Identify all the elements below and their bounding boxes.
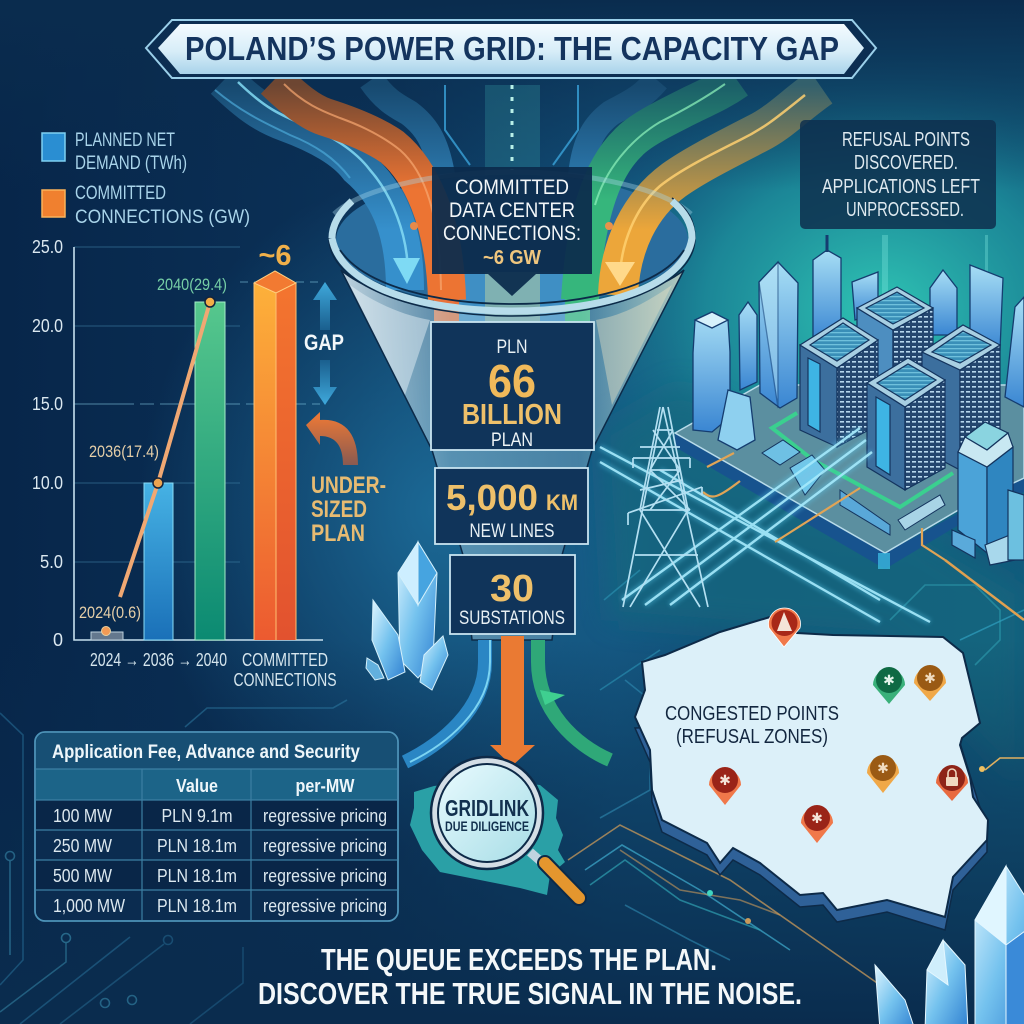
text: refusal points: REFUSAL POINTS — [842, 129, 970, 151]
legend item: committed connections: CONNECTIONS (GW) — [75, 207, 250, 228]
table rows: regressive pricing — [263, 836, 387, 856]
gridlink magnifier: DUE DILIGENCE — [445, 818, 529, 834]
axes — [74, 247, 323, 640]
icon: transmission tower — [623, 407, 708, 607]
gap indicator — [304, 282, 344, 405]
corner tower — [952, 422, 1024, 565]
table header: per-MW — [296, 776, 354, 796]
table rows: PLN 18.1m — [157, 896, 237, 916]
pin: west — [709, 767, 741, 805]
funnel interior — [336, 174, 688, 306]
central column — [434, 85, 590, 324]
table rows: 100 MW — [53, 806, 112, 826]
gridlink magnifier: GRIDLINK — [445, 795, 529, 821]
closing statement: THE QUEUE EXCEEDS THE PLAN. — [321, 942, 717, 977]
table header: Value — [176, 776, 218, 796]
map label — [665, 703, 839, 748]
table rows: 250 MW — [53, 836, 112, 856]
funnel stage: PLN 66 billion: PLAN — [491, 430, 533, 451]
undersized plan label — [311, 472, 386, 547]
y axis labels: 25.0 — [32, 237, 63, 257]
trend line — [102, 297, 215, 636]
grid lines — [74, 247, 322, 562]
pin: east lock — [936, 765, 968, 801]
legend item: committed connections: COMMITTED — [75, 183, 166, 204]
table rows: regressive pricing — [263, 806, 387, 826]
text: refusal points: APPLICATIONS LEFT — [822, 176, 980, 198]
text: refusal points — [800, 120, 996, 229]
bar chart — [32, 237, 336, 690]
funnel stage: PLN 66 billion: 66 — [488, 355, 536, 407]
y axis labels: 5.0 — [40, 552, 63, 572]
arrow: orange output — [490, 636, 535, 766]
orange stream left — [274, 80, 447, 300]
closing statement: DISCOVER THE TRUE SIGNAL IN THE NOISE. — [258, 976, 802, 1011]
pin: north-east amber — [914, 665, 946, 701]
y axis labels: 0 — [53, 630, 63, 650]
arrow: up — [313, 282, 337, 330]
table rows: regressive pricing — [263, 896, 387, 916]
legend item: committed connections — [42, 183, 250, 228]
pin: central amber — [867, 755, 899, 793]
lens — [431, 757, 543, 869]
legend — [42, 130, 250, 228]
data center: back — [857, 287, 933, 410]
table rows: PLN 18.1m — [157, 836, 237, 856]
glowing columns — [882, 235, 988, 295]
blue stream centre left — [371, 80, 442, 175]
table title — [36, 733, 397, 769]
data streams entering funnel — [215, 80, 821, 324]
undersized plan label: PLAN — [311, 520, 365, 547]
callout: committed data center connections: DATA CENTER — [449, 199, 575, 222]
arrow: down — [313, 360, 337, 405]
bar 2024 — [91, 632, 123, 640]
bar 2036 — [144, 483, 173, 640]
data labels: 2040(29.4) — [157, 275, 227, 294]
gridlink magnifier — [410, 757, 579, 898]
bar 2040 — [195, 302, 225, 640]
map land — [635, 617, 988, 917]
table rows: PLN 18.1m — [157, 866, 237, 886]
data center: front — [867, 358, 945, 490]
orange feeder lines — [703, 453, 945, 560]
table: application fee, advance and security — [35, 732, 398, 921]
y axis labels: 15.0 — [32, 394, 63, 414]
funnel stage: 30 substations — [450, 555, 575, 634]
pin: central amber: ✱ — [877, 760, 889, 776]
table rows: PLN 9.1m — [162, 806, 232, 826]
funnel stage: 5,000 km: NEW LINES — [470, 521, 554, 542]
crystals: bottom right — [875, 866, 1024, 1024]
table title: Application Fee, Advance and Security — [52, 742, 360, 763]
pin: north-east green — [873, 667, 905, 704]
undersized plan label: SIZED — [311, 496, 367, 523]
data labels: 2036(17.4) — [89, 442, 159, 461]
output streams — [405, 640, 610, 762]
map extruded edge — [635, 720, 987, 930]
x axis labels: CONNECTIONS — [234, 670, 336, 690]
isometric data center city — [675, 235, 1024, 569]
gold stream — [605, 87, 821, 295]
back towers — [693, 235, 1024, 450]
pin: north refusal point — [768, 608, 800, 647]
title banner — [146, 20, 876, 78]
gap label: GAP — [304, 330, 344, 355]
closing statement — [258, 942, 802, 1011]
table rows: regressive pricing — [263, 866, 387, 886]
data center: right — [922, 325, 1000, 470]
funnel stage: 30 substations: SUBSTATIONS — [459, 608, 565, 629]
funnel stage: 5,000 km — [435, 468, 588, 544]
table header — [36, 769, 397, 800]
glowing transmission lines — [600, 428, 930, 622]
crystals: centre — [366, 542, 448, 690]
undersized plan label: UNDER- — [311, 472, 386, 499]
blue stream centre right — [581, 80, 657, 175]
pin: north-east amber: ✱ — [924, 670, 936, 686]
table rows — [36, 769, 397, 920]
green power routes — [772, 413, 953, 507]
x axis labels: COMMITTED — [242, 650, 328, 670]
funnel — [329, 172, 695, 640]
funnel stage: PLN 66 billion: BILLION — [462, 399, 562, 431]
poland silhouette — [410, 782, 565, 895]
text: refusal points: UNPROCESSED. — [846, 199, 964, 221]
circuit traces — [0, 560, 1024, 1024]
value label ~6: ~6 — [258, 240, 292, 272]
pin: north-east green: ✱ — [883, 672, 895, 688]
map label: CONGESTED POINTS — [665, 703, 839, 725]
pin: south: ✱ — [811, 810, 823, 826]
text: refusal points: DISCOVERED. — [854, 152, 958, 174]
data labels — [79, 275, 227, 622]
map: Poland — [635, 608, 988, 930]
magnifier handle — [530, 852, 579, 898]
small substations — [762, 440, 945, 535]
y axis labels — [32, 237, 63, 650]
platform — [675, 385, 1024, 569]
table rows: 500 MW — [53, 866, 112, 886]
funnel stage: 5,000 km: 5,000 — [446, 477, 538, 518]
callout: committed data center connections: ~6 GW — [483, 247, 541, 269]
pin: west: ✱ — [719, 772, 731, 788]
legend item: planned net demand — [42, 130, 187, 174]
funnel stage: PLN 66 billion — [431, 322, 594, 451]
map label: (REFUSAL ZONES) — [676, 726, 828, 748]
table rows: 1,000 MW — [53, 896, 125, 916]
callout: committed data center connections: COMMITTED — [455, 176, 569, 199]
title banner: POLAND’S POWER GRID: THE CAPACITY GAP — [185, 30, 839, 67]
pin: south — [801, 805, 833, 843]
y axis labels: 20.0 — [32, 316, 63, 336]
funnel stage: PLN 66 billion: PLN — [496, 337, 528, 358]
bar committed connections — [254, 271, 296, 640]
blue stream left — [215, 80, 420, 290]
data labels: 2024(0.6) — [79, 603, 141, 622]
x axis labels: 2024 → 2036 → 2040 — [90, 650, 227, 670]
funnel stage: 5,000 km: KM — [546, 490, 578, 515]
funnel stage: 30 substations: 30 — [490, 568, 534, 610]
data center: left — [800, 318, 878, 447]
legend item: planned net demand: DEMAND (TWh) — [75, 153, 187, 174]
legend item: planned net demand: PLANNED NET — [75, 130, 175, 151]
arrow: undersized plan — [306, 412, 358, 465]
x axis labels — [90, 650, 336, 690]
callout: committed data center connections — [432, 167, 592, 296]
green stream — [580, 80, 737, 300]
callout: committed data center connections: CONNECTIONS: — [443, 222, 581, 245]
y axis labels: 10.0 — [32, 473, 63, 493]
